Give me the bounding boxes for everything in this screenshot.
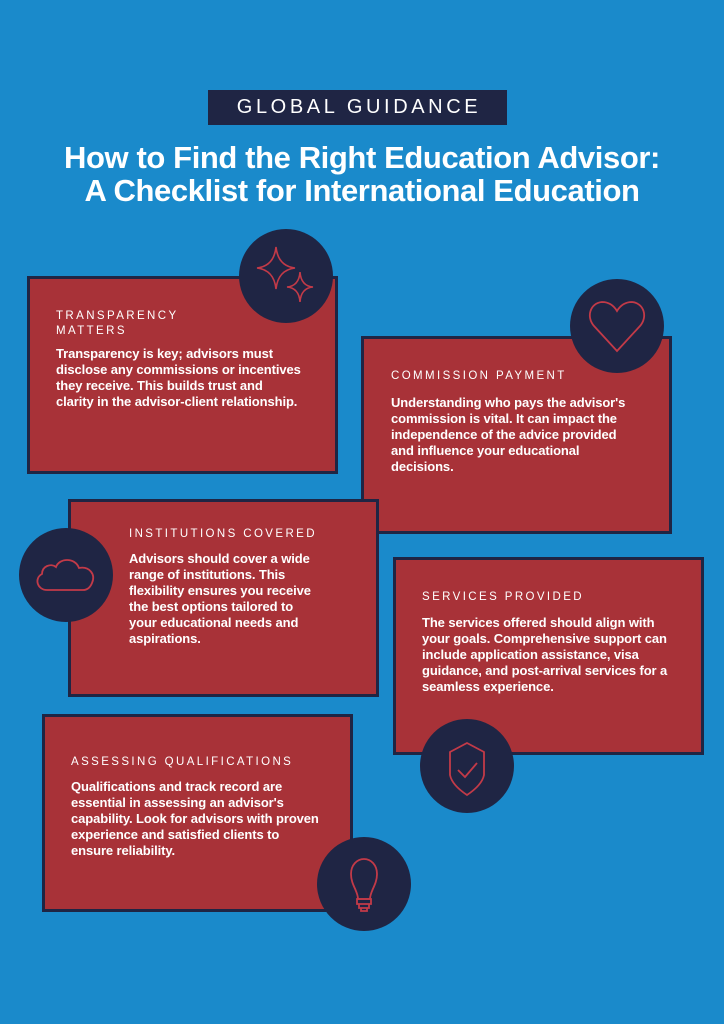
icon: sparkles xyxy=(239,229,333,323)
icon: shield check xyxy=(420,719,514,813)
body: commission is vital. It can impact the xyxy=(391,411,617,426)
body: capability. Look for advisors with proven xyxy=(71,811,319,826)
panel: institutions xyxy=(68,499,379,697)
body: your goals. Comprehensive support can xyxy=(422,631,667,646)
body: your educational needs and xyxy=(129,615,298,630)
title xyxy=(64,140,660,208)
body: decisions. xyxy=(391,459,454,474)
body: they receive. This builds trust and xyxy=(56,378,263,393)
body xyxy=(391,395,625,474)
heading: TRANSPARENCY xyxy=(56,310,179,322)
body xyxy=(422,615,668,694)
body: experience and satisfied clients to xyxy=(71,827,279,842)
body: flexibility ensures you receive xyxy=(129,583,311,598)
icon: light bulb xyxy=(317,837,411,931)
title: A Checklist for International Education xyxy=(84,173,640,208)
icon: heart xyxy=(570,279,664,373)
body: include application assistance, visa xyxy=(422,647,639,662)
body: Transparency is key; advisors must xyxy=(56,346,273,361)
panel: transparency xyxy=(27,276,338,474)
body xyxy=(71,779,319,858)
heading: SERVICES PROVIDED xyxy=(422,591,584,603)
body: Advisors should cover a wide xyxy=(129,551,310,566)
body: ensure reliability. xyxy=(71,843,175,858)
heading: MATTERS xyxy=(56,325,127,337)
body xyxy=(129,551,311,646)
body: aspirations. xyxy=(129,631,201,646)
panel: services xyxy=(393,557,704,755)
body: the best options tailored to xyxy=(129,599,293,614)
title: How to Find the Right Education Advisor: xyxy=(64,140,660,175)
body: Qualifications and track record are xyxy=(71,779,282,794)
body: range of institutions. This xyxy=(129,567,285,582)
panel: commission xyxy=(361,336,672,534)
body: The services offered should align with xyxy=(422,615,654,630)
heading: COMMISSION PAYMENT xyxy=(391,370,567,382)
body xyxy=(56,346,301,409)
panel: qualifications xyxy=(42,714,353,912)
icon: cloud xyxy=(19,528,113,622)
heading xyxy=(56,310,179,337)
body: and influence your educational xyxy=(391,443,579,458)
body: guidance, and post-arrival services for a xyxy=(422,663,667,678)
header tag xyxy=(208,90,507,125)
body: independence of the advice provided xyxy=(391,427,616,442)
body: clarity in the advisor-client relationship. xyxy=(56,394,297,409)
heading: ASSESSING QUALIFICATIONS xyxy=(71,756,293,768)
body: Understanding who pays the advisor's xyxy=(391,395,625,410)
heading: INSTITUTIONS COVERED xyxy=(129,528,317,540)
header tag: GLOBAL GUIDANCE xyxy=(237,96,481,118)
body: disclose any commissions or incentives xyxy=(56,362,301,377)
body: essential in assessing an advisor's xyxy=(71,795,284,810)
body: seamless experience. xyxy=(422,679,554,694)
